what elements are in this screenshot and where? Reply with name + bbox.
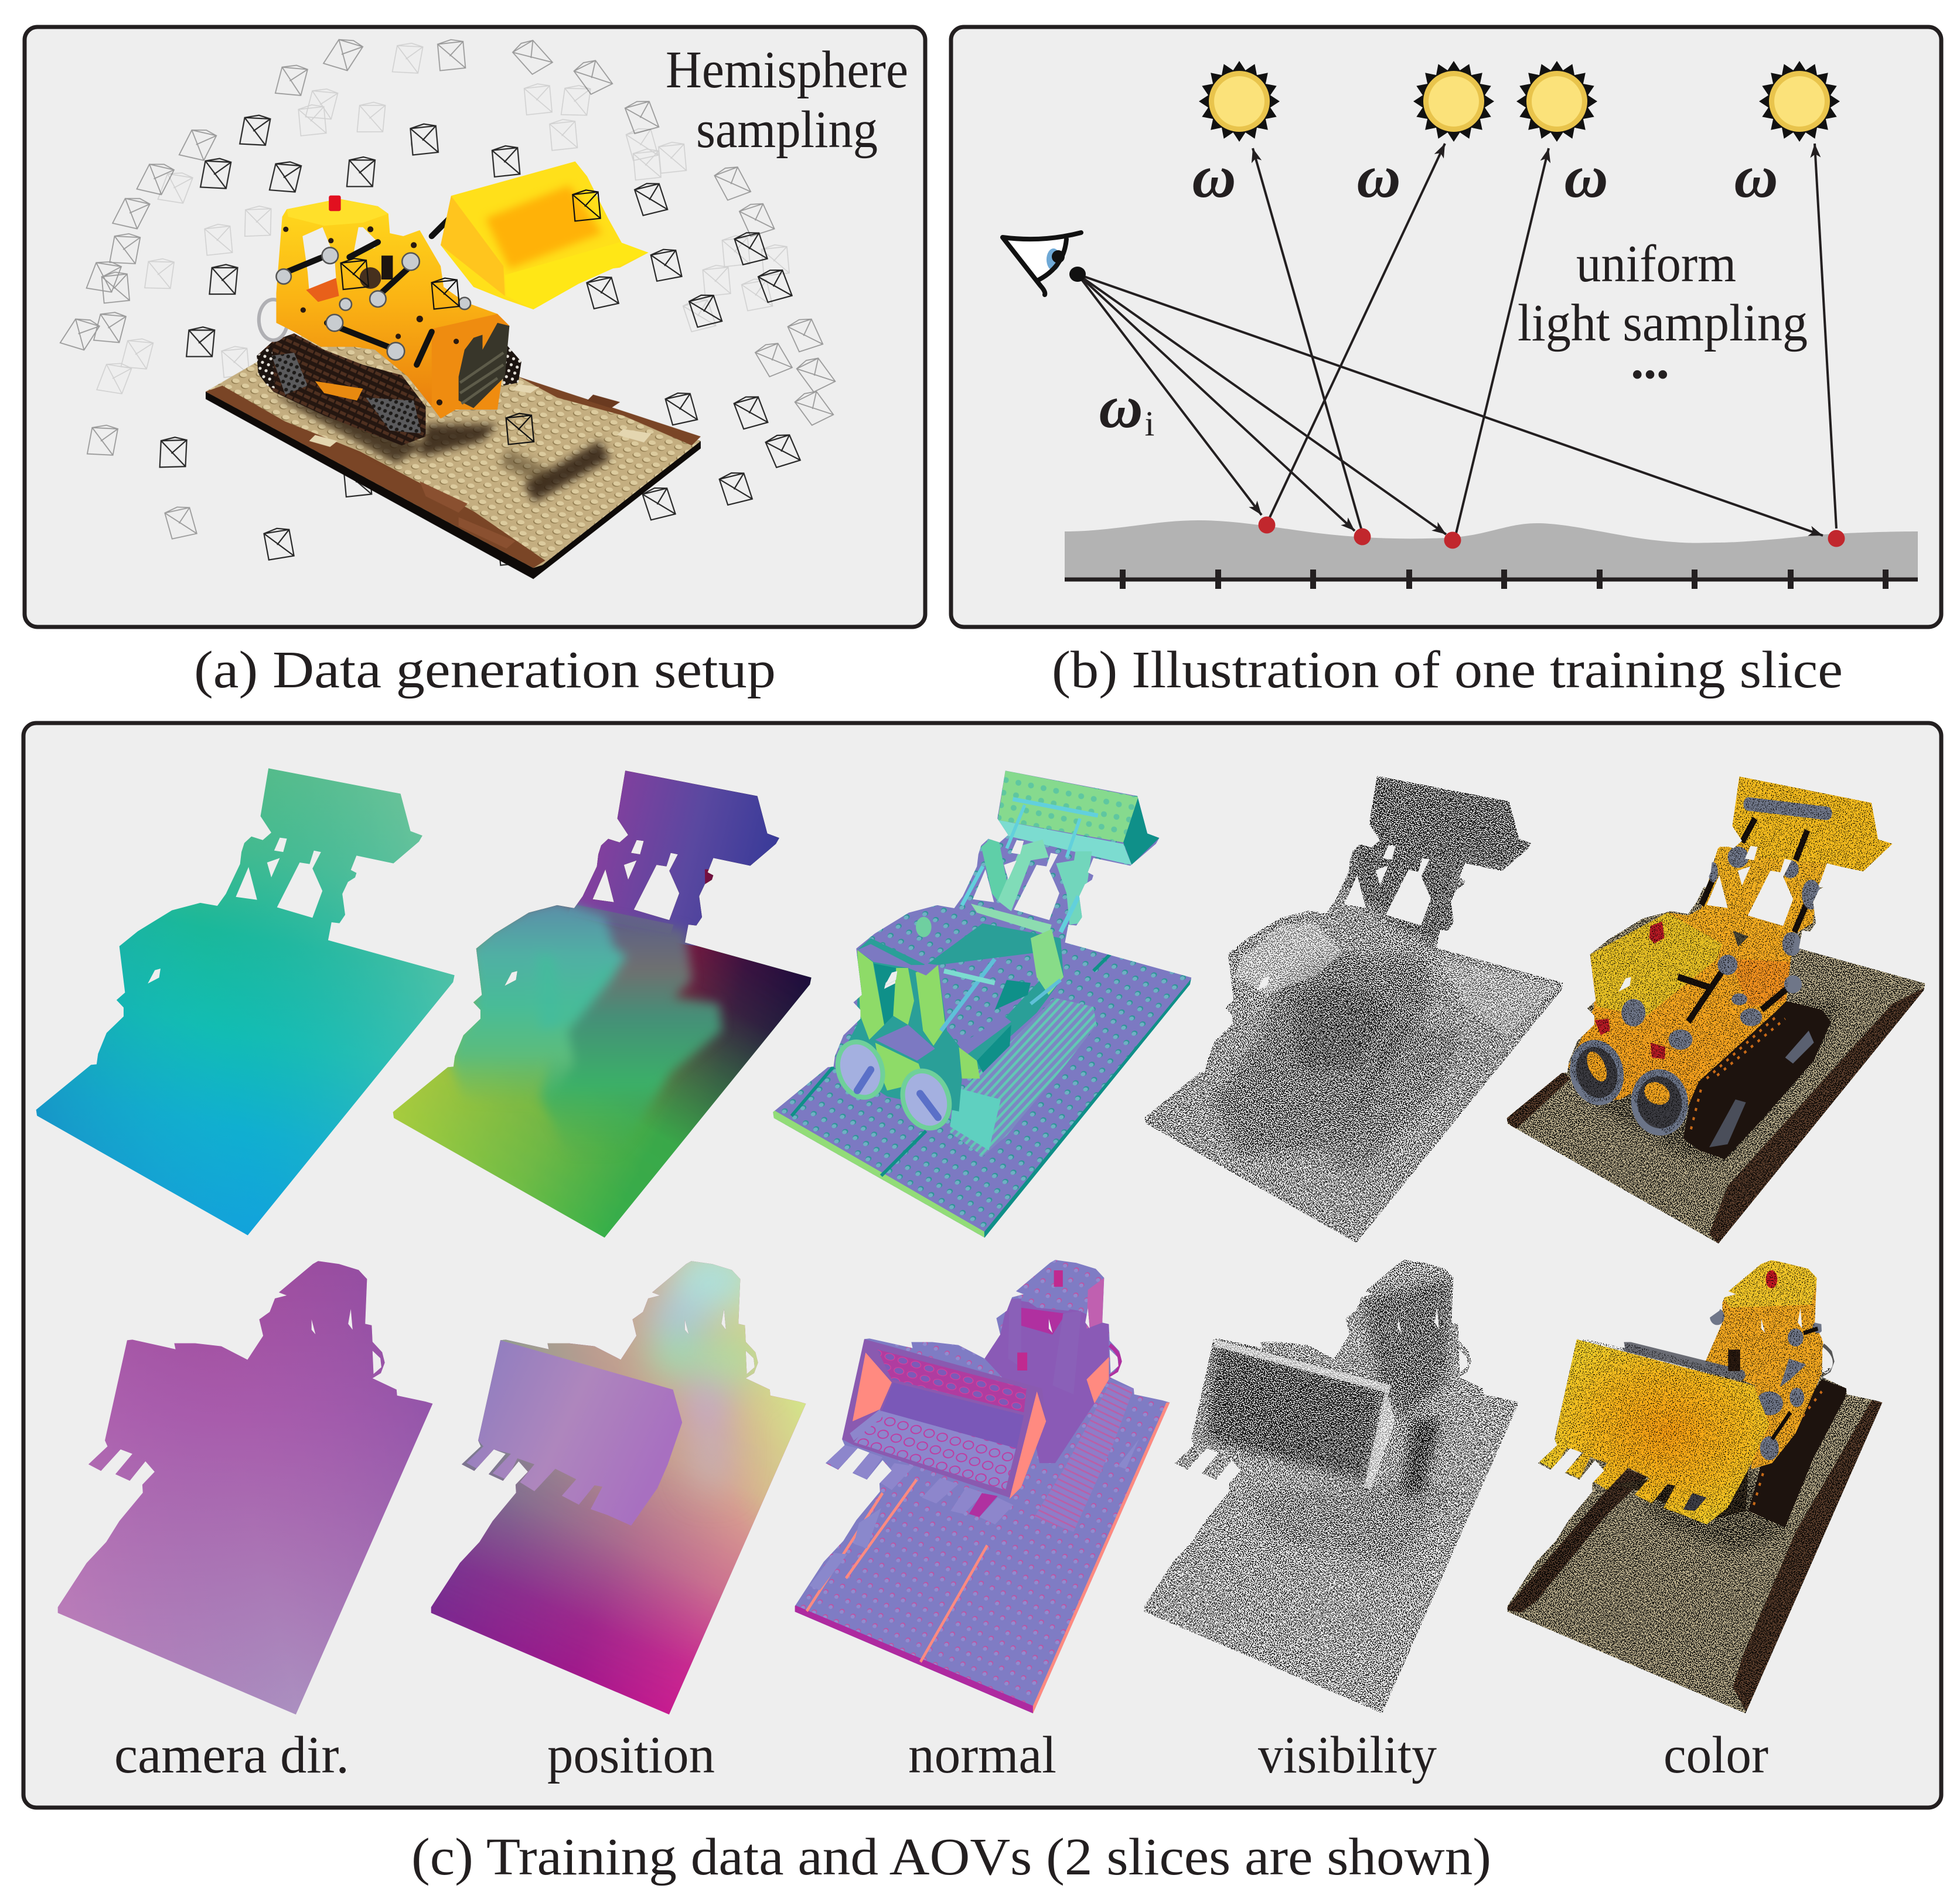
omega subscript: i: [1145, 404, 1154, 443]
hydraulic rods: [279, 218, 449, 364]
brown side strips: [1709, 984, 1932, 1246]
label: hemisphere sampling: [666, 41, 908, 159]
slice 2 visibility: [1114, 1224, 1582, 1762]
light rays toward suns: [1253, 144, 1836, 533]
caption c: (c) Training data and AOVs (2 slices are shown): [411, 1828, 1491, 1886]
hoop wheel: [259, 299, 288, 340]
label: uniform light sampling: uniform: [1576, 235, 1736, 293]
gray linkage: [1627, 1346, 1741, 1375]
slice 2 normal: [791, 1254, 1173, 1720]
black rods: [1678, 819, 1808, 1022]
panel b frame: [951, 27, 1941, 627]
baseplate side: [206, 391, 701, 579]
cast shadows on plate: [273, 394, 605, 493]
omega labels: [1099, 143, 1778, 441]
slice 1 position: [393, 770, 812, 1237]
icon: eye: [1003, 233, 1086, 295]
panel: training data and AOVs: [2, 723, 1941, 1808]
loader arms: [981, 839, 1007, 901]
AOV column labels: position: [547, 1726, 715, 1784]
slice 2 color: [1500, 1260, 1893, 1726]
cab and body: [836, 905, 1063, 1112]
red blocks: [1595, 922, 1665, 1059]
camera frusta in front of the model: [341, 190, 601, 445]
bucket: [1539, 1339, 1770, 1525]
AOV column labels: visibility: [1258, 1726, 1437, 1784]
baseplate top: [206, 332, 701, 568]
omega labels: ω: [1192, 143, 1236, 210]
position plate field: [393, 770, 812, 1237]
axis with ticks: [1065, 570, 1918, 589]
omega labels: ω: [1734, 143, 1778, 210]
label: uniform light sampling: light sampling: [1518, 294, 1808, 352]
front grille: [459, 323, 509, 408]
chrome joints: [276, 247, 471, 360]
camera frusta behind the model: [58, 36, 837, 565]
body: [1568, 776, 1893, 1134]
front track: [257, 333, 426, 445]
tower: [984, 1299, 1109, 1463]
omega labels: ω: [1564, 143, 1608, 210]
loop: [1822, 1345, 1835, 1378]
cylinder and gear: [381, 255, 393, 279]
bucket: [998, 770, 1138, 843]
position body: [449, 899, 722, 1162]
slice 1 color: [1500, 776, 1932, 1252]
omega labels: ω: [1356, 143, 1401, 210]
slice 1 camera direction: [36, 768, 455, 1235]
caption b: (b) Illustration of one training slice: [1052, 641, 1843, 699]
slice 2 position: [401, 1225, 846, 1763]
AOV column labels: normal: [908, 1726, 1056, 1784]
track: [1034, 1382, 1134, 1532]
lego bulldozer render: [206, 162, 701, 579]
omega labels: ω: [1099, 373, 1143, 441]
body holes: [283, 226, 459, 405]
plate side faces: [771, 1110, 984, 1240]
suns: [1199, 61, 1840, 142]
AOV column labels: camera dir.: [114, 1726, 349, 1784]
track: [1683, 1001, 1831, 1159]
raised plates: [809, 1439, 1139, 1590]
label: uniform light sampling: ...: [1631, 332, 1669, 390]
position tower: [647, 1246, 759, 1488]
position bucket and arms: [568, 762, 785, 947]
gray wheels: [1564, 1034, 1630, 1112]
AOV column labels: [114, 1726, 1768, 1784]
bucket teeth: [826, 1445, 1013, 1525]
sample points: [1259, 517, 1845, 548]
track: [950, 998, 1096, 1156]
panel: training slice illustration: [951, 27, 1941, 627]
position plate field: [401, 1225, 846, 1763]
AOV column labels: color: [1664, 1726, 1768, 1784]
slice 1 normal: [762, 762, 1210, 1246]
track: [1748, 1379, 1846, 1528]
bucket: [842, 1339, 1046, 1498]
panel c frame: [23, 723, 1941, 1808]
ground surface: [1065, 520, 1918, 579]
plate with studs: [762, 762, 1210, 1246]
view rays from the eye: [1078, 274, 1823, 536]
label: uniform light sampling: [1518, 235, 1808, 390]
cab and body: [276, 199, 509, 418]
rear track: [500, 338, 521, 386]
caption a: (a) Data generation setup: [194, 641, 776, 699]
slice 1 visibility: [1110, 737, 1593, 1275]
position bucket: [466, 1340, 682, 1526]
panel: data generation setup: [25, 27, 925, 627]
gray joints: [1621, 797, 1833, 1050]
red beacon: [329, 196, 341, 211]
red beacon: [1766, 1270, 1777, 1288]
plate side faces: [793, 1605, 1033, 1714]
brown bricks along plate edges: [206, 377, 701, 568]
slice 2 camera direction: [28, 1225, 472, 1763]
plate with studs: [791, 1254, 1173, 1720]
brown side strips: [1505, 1468, 1647, 1612]
tower: [1704, 1260, 1823, 1469]
bucket: [441, 162, 649, 309]
panel a frame: [25, 27, 925, 627]
label: hemisphere sampling: Hemisphere: [666, 41, 908, 99]
label: hemisphere sampling: sampling: [696, 101, 878, 159]
wheels: [830, 1035, 890, 1104]
